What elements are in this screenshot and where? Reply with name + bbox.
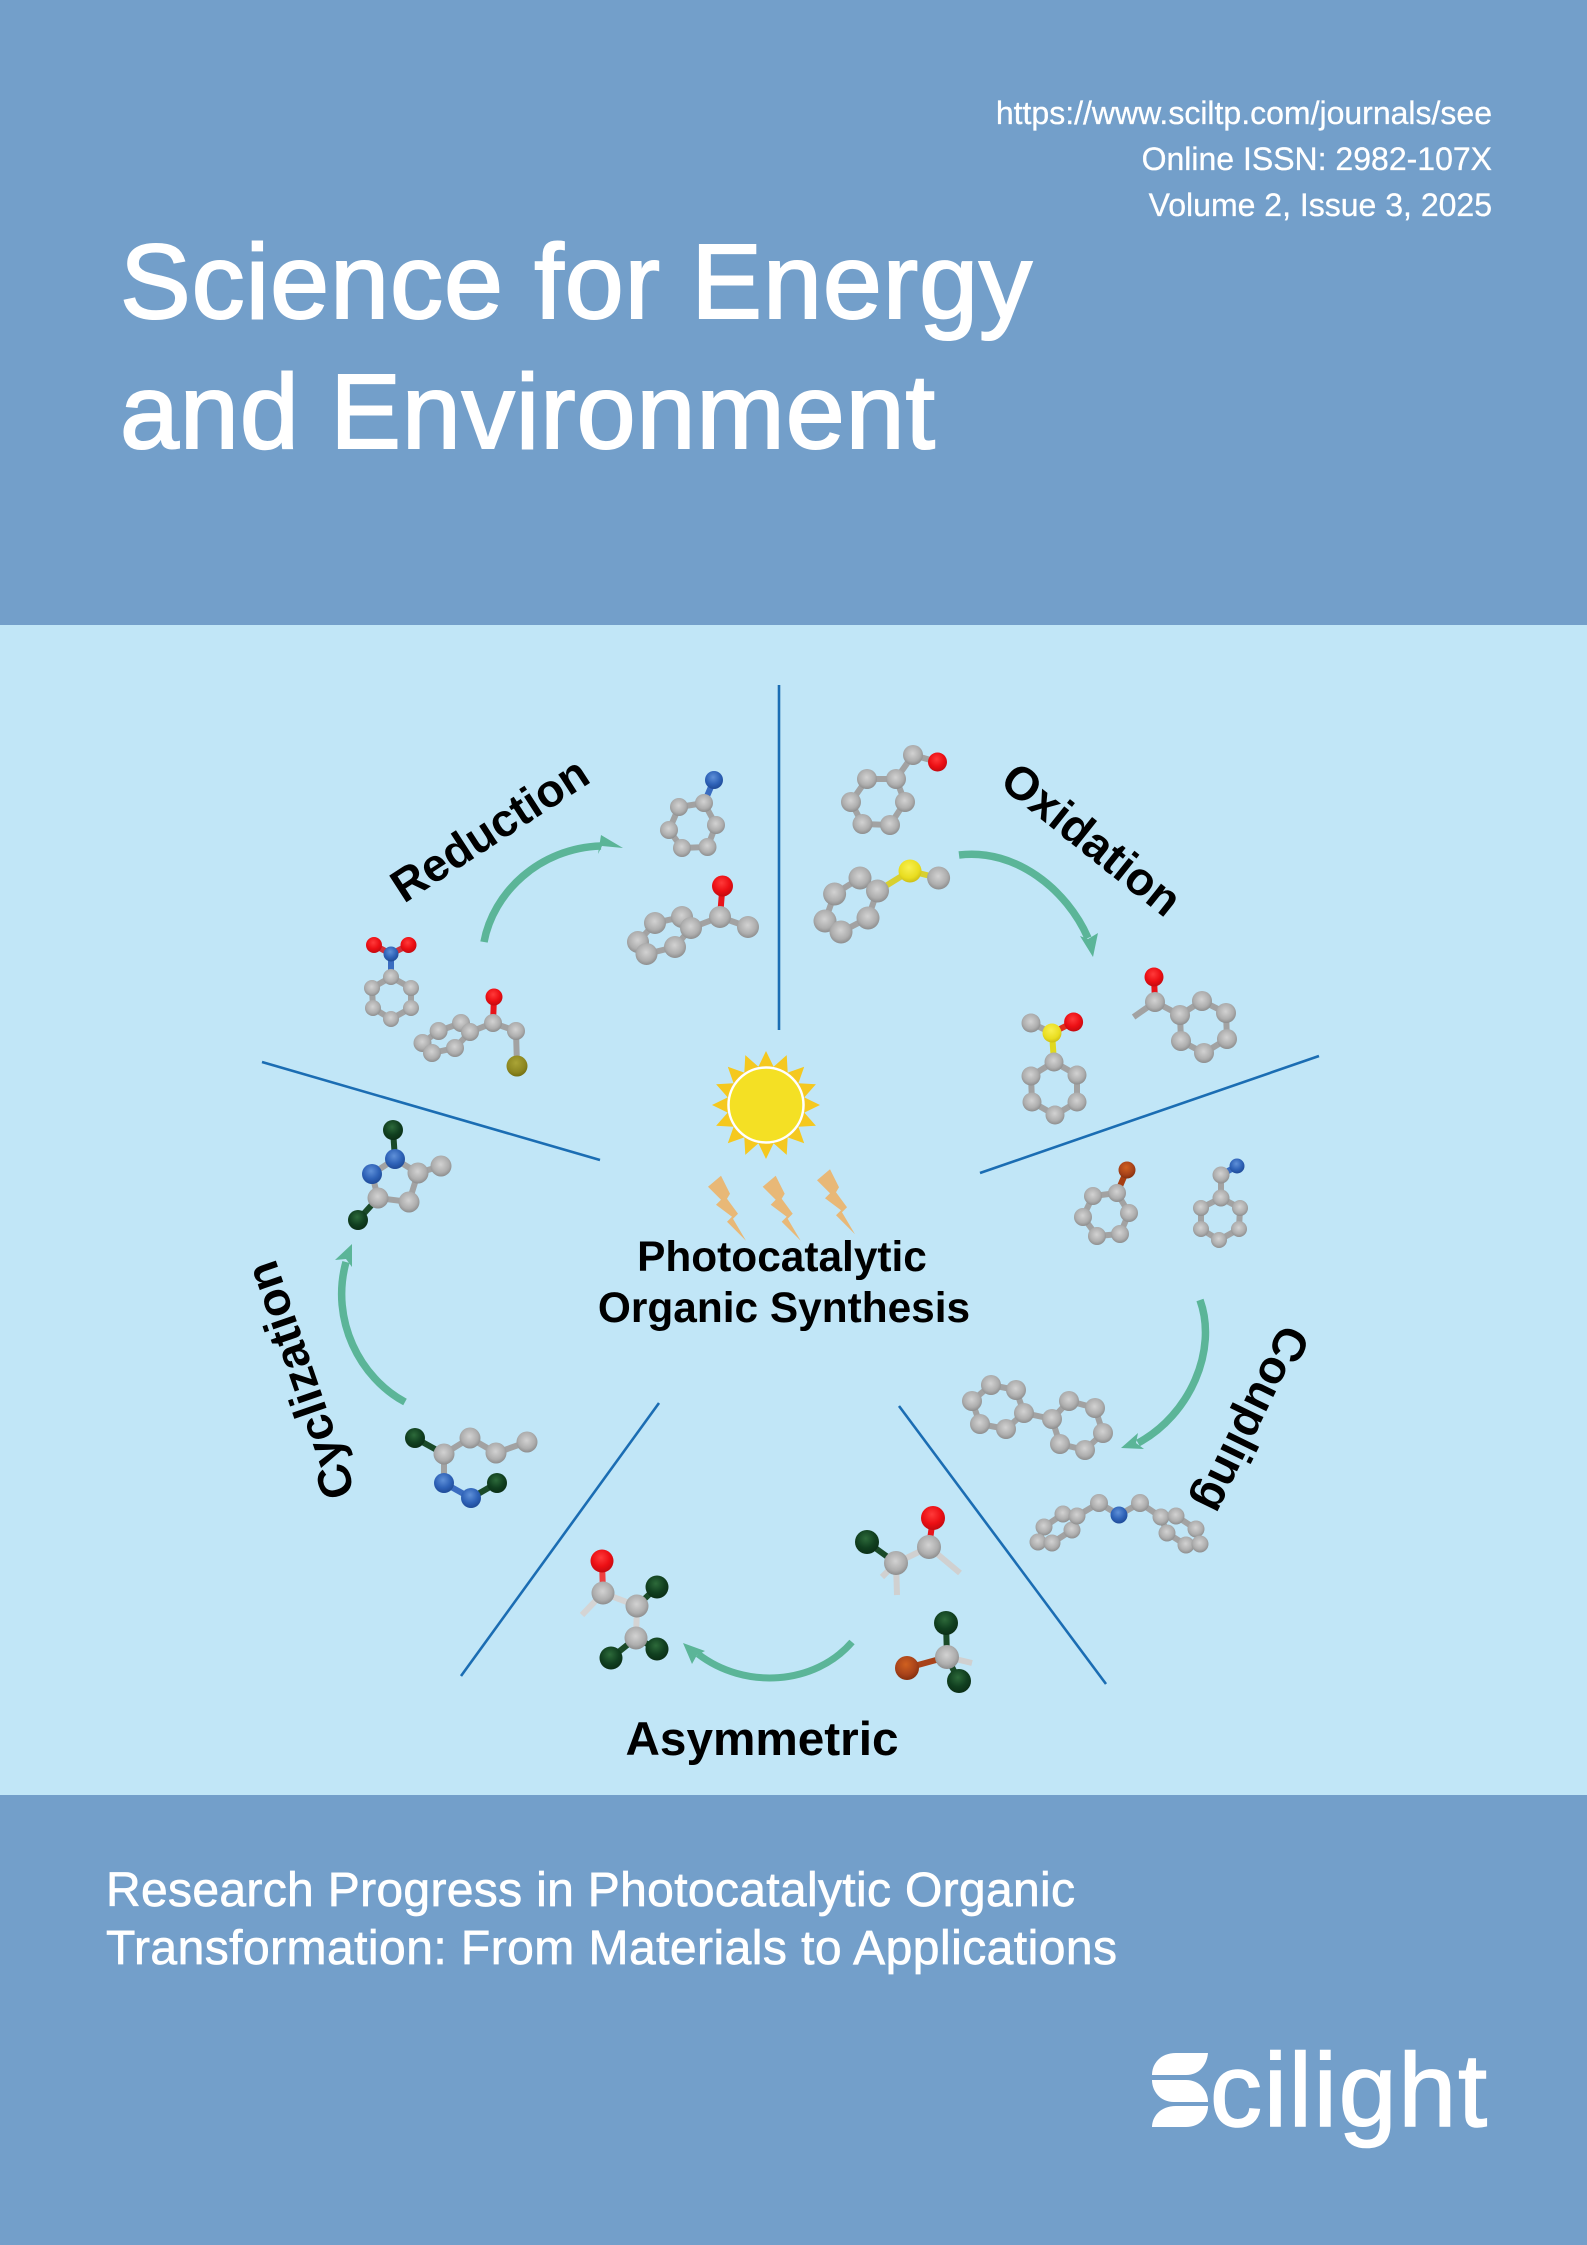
panel: Oxidation sector (814, 745, 1237, 1124)
molecule: chiral product (582, 1550, 668, 1670)
icon: lightning bolts (708, 1169, 855, 1241)
molecule: halomethane reactant (895, 1611, 972, 1693)
journal details: Volume 2, Issue 3, 2025 (1149, 187, 1492, 223)
panel: central diagram (0, 625, 1587, 1795)
journal details: Online ISSN: 2982-107X (1142, 141, 1492, 177)
arrow: Asymmetric (683, 1642, 852, 1678)
journal title: and Environment (120, 353, 935, 471)
article title: Research Progress in Photocatalytic Organic (106, 1864, 1075, 1917)
journal details (996, 95, 1492, 223)
molecule: benzylamine reactant (1193, 1158, 1248, 1248)
arrow: Reduction (484, 835, 623, 942)
molecule: acetophenone product (1134, 968, 1237, 1063)
central heading: Photocatalytic (637, 1233, 927, 1280)
molecule: acetophenone product (627, 876, 759, 965)
arrow: Cyclization (335, 1244, 405, 1402)
panel: Coupling sector (962, 1158, 1320, 1554)
molecule: thioanisole reactant (814, 860, 950, 944)
molecule: dibenzylamine product (1030, 1494, 1208, 1554)
journal title: Science for Energy (120, 223, 1032, 341)
journal details: https://www.sciltp.com/journals/see (996, 95, 1492, 131)
molecule: bromobenzene reactant (1074, 1162, 1138, 1245)
panel: Reduction sector (364, 746, 759, 1076)
panel: Cyclization sector (234, 1120, 538, 1508)
molecule: cyclized product (348, 1120, 452, 1230)
molecule: open-chain reactant (405, 1428, 538, 1508)
arrow: Oxidation (959, 854, 1098, 957)
panel: footer band (0, 1795, 1587, 2245)
logo: Scilight: cilight (1210, 2033, 1487, 2149)
journal title (120, 223, 1032, 471)
heading: Asymmetric: Asymmetric (625, 1713, 899, 1766)
arrow: Coupling (1121, 1300, 1205, 1449)
central heading (598, 1233, 970, 1331)
molecule: benzaldehyde reactant (841, 745, 947, 835)
article title: Transformation: From Materials to Applications (106, 1922, 1117, 1975)
molecule: nitrobenzene reactant (364, 937, 419, 1027)
sector dividers (262, 685, 1319, 1684)
central heading: Organic Synthesis (598, 1284, 970, 1331)
heading: Cyclization: Cyclization (234, 1255, 365, 1506)
molecule: bromoacetophenone reactant (414, 988, 528, 1076)
heading: Oxidation: Oxidation (992, 752, 1192, 926)
molecule: biphenyl product (962, 1375, 1113, 1460)
panel: Asymmetric sector (582, 1506, 972, 1766)
molecule: sulfoxide product (1022, 1012, 1086, 1124)
icon: sun (712, 1051, 820, 1159)
molecule: chloro aldehyde reactant (855, 1506, 960, 1595)
molecule: aniline product (660, 771, 725, 857)
panel: header band (0, 0, 1587, 625)
heading: Reduction: Reduction (381, 746, 598, 912)
article title (106, 1864, 1117, 1975)
heading: Coupling: Coupling (1185, 1318, 1320, 1522)
